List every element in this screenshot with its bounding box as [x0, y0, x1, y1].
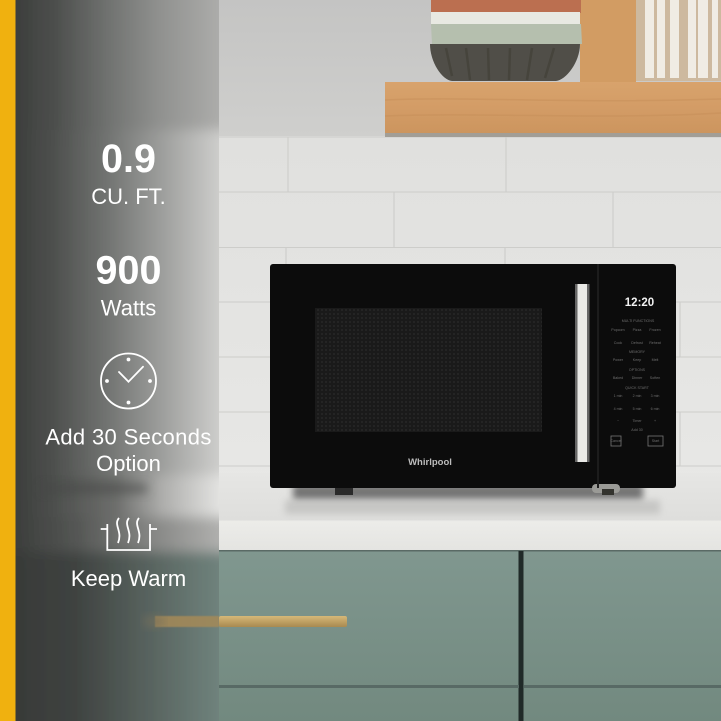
yellow side bar — [0, 0, 16, 721]
door window — [315, 308, 542, 432]
control panel: Power — [613, 358, 624, 362]
door handle — [575, 284, 589, 462]
cancel and start buttons — [611, 436, 663, 446]
wall background — [0, 0, 721, 137]
control panel: Add 30 — [631, 428, 643, 432]
icon: steaming pot — [101, 518, 157, 550]
display: 12:20 — [625, 297, 654, 309]
control panel: Melt — [652, 358, 658, 362]
brand logo: Whirlpool — [408, 457, 452, 468]
control panel: Start — [652, 439, 659, 443]
label: keep warm: Keep Warm — [71, 566, 186, 591]
control panel: Keep — [633, 358, 641, 362]
control panel: Cook — [614, 341, 622, 345]
ribbed vase — [636, 0, 721, 81]
control panel: 2 min — [633, 394, 641, 398]
left gradient panel — [15, 0, 219, 721]
cabinet handle — [219, 616, 347, 627]
spec: capacity: CU. FT. — [91, 184, 166, 209]
microwave — [270, 264, 676, 495]
control panel: 1 min — [614, 394, 622, 398]
control panel: 3 min — [651, 394, 659, 398]
bowl stack — [430, 0, 582, 81]
control panel: Popcorn — [611, 328, 625, 332]
tile backsplash — [219, 136, 721, 502]
control panel: QUICK START — [625, 386, 650, 390]
control panel: 5 min — [633, 407, 641, 411]
counter shadow under microwave — [293, 484, 643, 500]
label: add 30 seconds option: Add 30 Seconds — [45, 424, 212, 450]
spec: wattage: 900 — [96, 248, 161, 292]
label: add 30 seconds option: Option — [96, 451, 161, 476]
microwave body — [270, 264, 676, 488]
control panel: Frozen — [649, 328, 661, 332]
control panel: + — [654, 419, 656, 423]
blurred reflections — [42, 484, 147, 493]
spec: wattage: Watts — [101, 296, 156, 320]
spec: capacity — [91, 137, 166, 209]
shelf plank — [385, 82, 721, 134]
control panel: − — [617, 419, 619, 423]
control panel: Defrost — [631, 341, 643, 345]
icon: clock — [101, 354, 156, 408]
spec: capacity: 0.9 — [101, 137, 156, 181]
cabinets — [0, 550, 721, 721]
door divider — [597, 264, 599, 488]
control panel: Timer — [632, 419, 642, 423]
control panel: Soften — [650, 376, 660, 380]
control panel: OPTIONS — [629, 368, 646, 372]
feet — [335, 488, 353, 495]
control panel — [610, 319, 661, 443]
control panel: 6 min — [651, 407, 659, 411]
control panel: Cancel — [610, 439, 622, 443]
control panel: 4 min — [614, 407, 622, 411]
wooden shelf with bowls and vase — [385, 0, 721, 137]
shelf back bracket — [580, 0, 636, 82]
countertop — [219, 473, 721, 551]
spec: wattage — [96, 248, 161, 320]
control panel: Dinner — [632, 376, 643, 380]
control panel: Pizza — [633, 328, 641, 332]
label: add 30 seconds option — [45, 424, 212, 476]
control panel: MEMORY — [629, 350, 646, 354]
control panel: Baked — [613, 376, 623, 380]
control panel: Reheat — [649, 341, 661, 345]
control panel: MULTI FUNCTIONS — [622, 319, 655, 323]
